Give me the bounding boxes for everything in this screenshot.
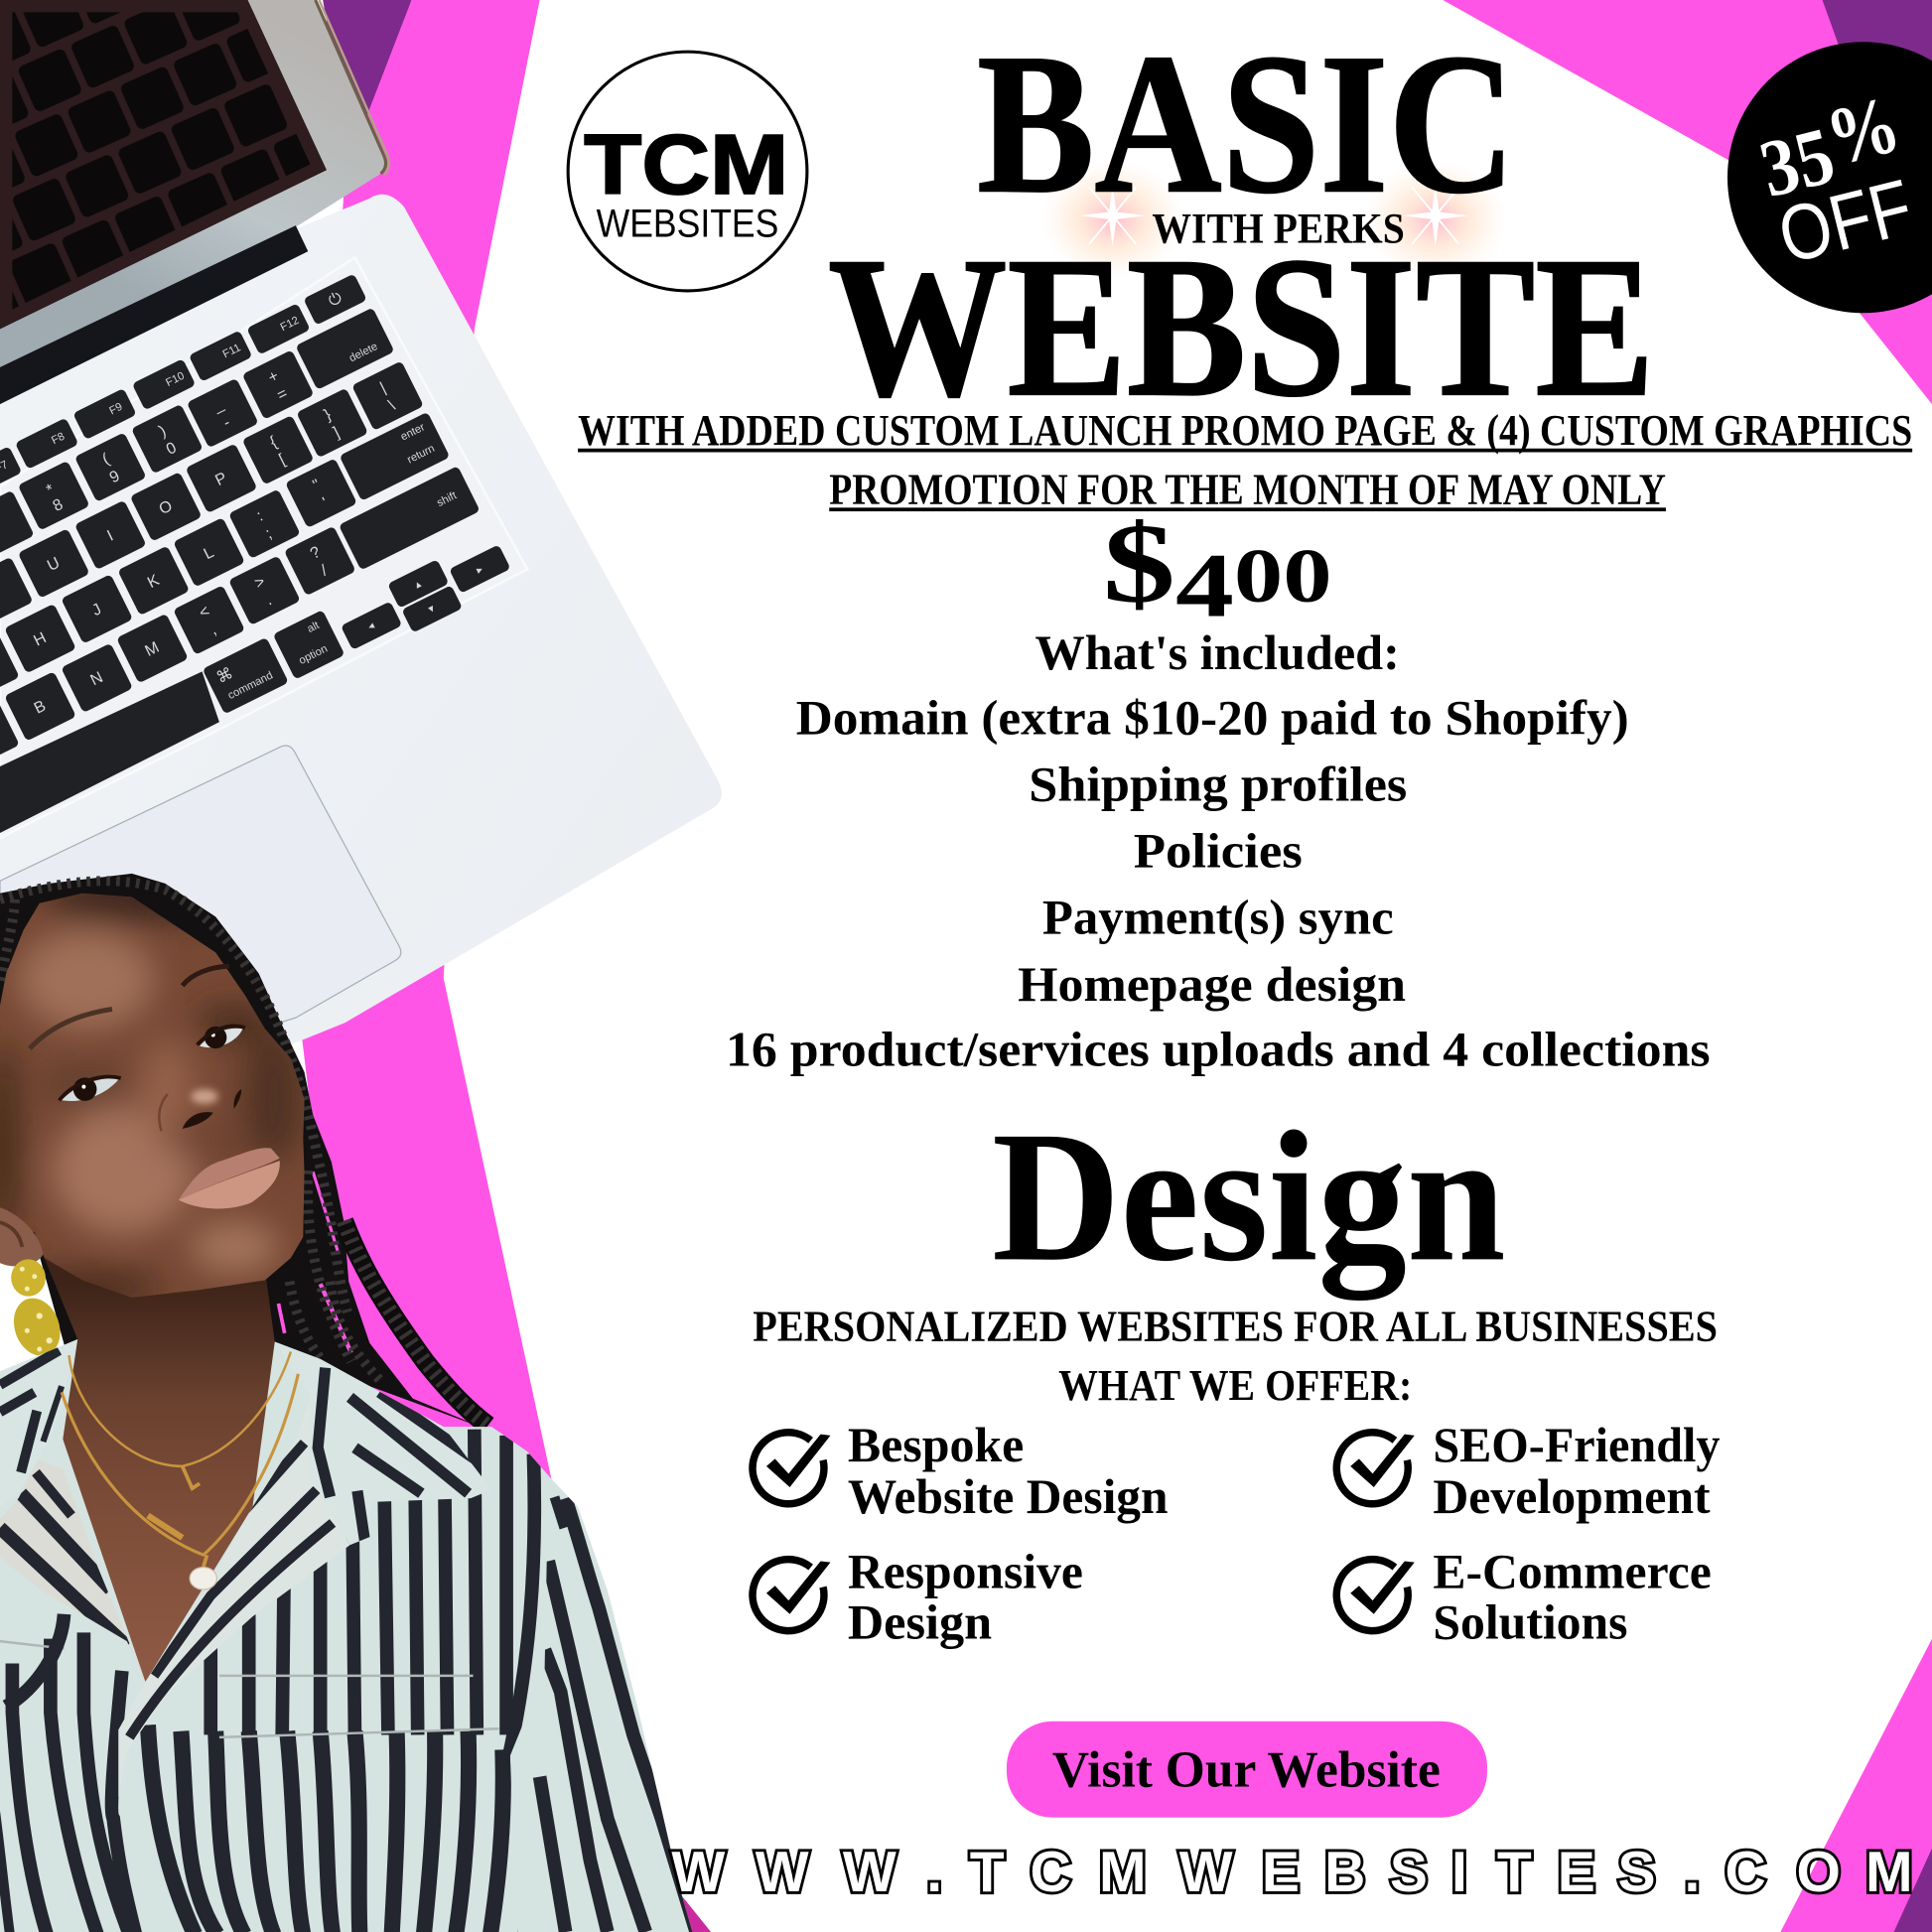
discount badge: % bbox=[1817, 78, 1908, 183]
keyboard keys: P bbox=[212, 469, 230, 489]
left collar lapel bbox=[0, 1460, 141, 1672]
feature: Bespoke Website Design: Bespoke bbox=[848, 1418, 1024, 1472]
keyboard keys: enter bbox=[399, 421, 427, 443]
laptop base bbox=[0, 195, 722, 1232]
feature: E-Commerce Solutions: E-Commerce bbox=[1433, 1545, 1712, 1599]
button: Visit Our Website: Visit Our Website bbox=[1052, 1742, 1441, 1799]
feature: E-Commerce Solutions: Solutions bbox=[1433, 1595, 1627, 1650]
keyboard keys: I bbox=[104, 527, 116, 545]
keyboard keys: ⏻ bbox=[326, 289, 345, 310]
right lapel bbox=[118, 1440, 349, 1797]
keyboard keys: return bbox=[405, 443, 437, 467]
keyboard keys: K bbox=[145, 571, 162, 592]
feature: Responsive Design: Responsive bbox=[848, 1545, 1083, 1599]
keyboard keys: * bbox=[44, 481, 58, 499]
outer braid bbox=[344, 1221, 487, 1426]
keyboard keys: F12 bbox=[279, 315, 301, 334]
feature: Bespoke Website Design: Website Design bbox=[848, 1469, 1169, 1524]
feature: Responsive Design: Design bbox=[848, 1595, 992, 1650]
icon: check circle bbox=[1336, 1433, 1415, 1504]
keyboard keys: ⌘ bbox=[213, 664, 236, 687]
pink slits in braids bbox=[278, 1172, 351, 1353]
keyboard keys: F8 bbox=[50, 431, 67, 447]
feature: Responsive Design bbox=[753, 1545, 1083, 1650]
logo badge: WEBSITES bbox=[597, 202, 778, 245]
discount badge bbox=[1727, 42, 1932, 313]
price: 4 bbox=[1175, 535, 1234, 636]
keyboard keys: } bbox=[322, 405, 335, 424]
logo badge bbox=[568, 52, 807, 291]
shape: bottom-left magenta wedge bbox=[671, 1887, 711, 1932]
included list: Payment(s) sync bbox=[1042, 891, 1394, 945]
keyboard keys: ◂ bbox=[366, 620, 376, 633]
keyboard keys: ▾ bbox=[427, 603, 437, 616]
feature: Bespoke Website Design bbox=[753, 1418, 1169, 1524]
keyboard keys: N bbox=[87, 668, 106, 689]
keyboard keys: ; bbox=[263, 524, 275, 542]
keyboard keys: O bbox=[156, 496, 175, 518]
included list: Homepage design bbox=[1018, 957, 1406, 1012]
keyboard well bbox=[0, 257, 527, 838]
body stripes, upper bbox=[204, 1648, 218, 1735]
promotion line: PROMOTION FOR THE MONTH OF MAY ONLY bbox=[829, 465, 1666, 514]
keyboard keys: F9 bbox=[107, 401, 124, 417]
sparkle: left bbox=[1041, 160, 1184, 278]
keyboard keys: 0 bbox=[163, 439, 180, 459]
keyboard keys: B bbox=[31, 697, 49, 718]
shirt sleeve bbox=[505, 1472, 702, 1932]
lips bbox=[179, 1148, 280, 1208]
keyboard keys: ) bbox=[156, 422, 169, 440]
heading: Design: Design bbox=[992, 1092, 1506, 1301]
nose bbox=[159, 1089, 241, 1131]
keyboard keys: F11 bbox=[221, 342, 242, 360]
tagline: PERSONALIZED WEBSITES FOR ALL BUSINESSES bbox=[753, 1301, 1718, 1350]
keyboard keys: option bbox=[297, 643, 330, 667]
keyboard keys: ( bbox=[99, 450, 113, 469]
shape: bottom-right purple wedge bbox=[1894, 1849, 1932, 1932]
keyboard keys: alt bbox=[306, 620, 322, 635]
keyboard keys: ] bbox=[331, 424, 343, 442]
included list: Domain (extra $10-20 paid to Shopify) bbox=[796, 691, 1629, 746]
keyboard keys: 9 bbox=[106, 467, 122, 486]
keyboard keys: " bbox=[310, 476, 324, 494]
feature: SEO-Friendly Development: Development bbox=[1433, 1469, 1711, 1524]
discount badge: 35 bbox=[1751, 107, 1853, 214]
eyes and brows bbox=[30, 966, 245, 1101]
keyboard keys: < bbox=[197, 602, 212, 622]
icon: check circle bbox=[1336, 1560, 1415, 1631]
keyboard keys: { bbox=[267, 433, 280, 451]
keyboard keys bbox=[0, 274, 510, 833]
keyboard keys: H bbox=[31, 628, 49, 650]
feature: SEO-Friendly Development bbox=[1336, 1418, 1721, 1524]
woman portrait illustration bbox=[0, 863, 702, 1932]
title: WEBSITE: WEBSITE bbox=[828, 215, 1655, 438]
trackpad bbox=[0, 746, 401, 1109]
keyboard keys: 8 bbox=[50, 495, 66, 515]
keyboard keys: U bbox=[45, 554, 63, 575]
keyboard keys: ? bbox=[308, 543, 324, 563]
price: 00 bbox=[1234, 533, 1332, 619]
keyboard keys: _ bbox=[209, 394, 226, 415]
included list: Policies bbox=[1134, 824, 1303, 879]
offer heading: WHAT WE OFFER: bbox=[1058, 1360, 1412, 1410]
shape: top-right purple wedge bbox=[1823, 0, 1932, 73]
feature: SEO-Friendly Development: SEO-Friendly bbox=[1433, 1418, 1721, 1472]
keyboard keys: ▴ bbox=[413, 578, 424, 592]
neck and chest bbox=[45, 1258, 311, 1682]
keyboard keys: [ bbox=[276, 451, 289, 469]
keyboard keys: : bbox=[254, 507, 266, 525]
keyboard keys: - bbox=[220, 413, 233, 432]
website URL: WWW.TCMWEBSITES.COM bbox=[671, 1841, 1913, 1904]
included list: Shipping profiles bbox=[1029, 758, 1407, 812]
title: BASIC: BASIC bbox=[977, 12, 1516, 234]
laptop screen lid bbox=[0, 0, 389, 367]
included list: What's included: bbox=[1035, 625, 1400, 680]
keyboard keys: J bbox=[89, 600, 104, 620]
keyboard keys: > bbox=[251, 573, 268, 593]
laptop photo illustration bbox=[0, 0, 722, 1044]
hair mass bbox=[0, 874, 486, 1430]
keyboard keys: M bbox=[142, 638, 162, 660]
keyboard keys: shift bbox=[435, 489, 460, 509]
keyboard keys: F10 bbox=[164, 370, 187, 389]
face bbox=[0, 894, 304, 1298]
keyboard keys: , bbox=[207, 621, 219, 638]
shape: left pink band bbox=[296, 0, 579, 1601]
shape: bottom-right pink wedge bbox=[1780, 1639, 1932, 1932]
keyboard keys: command bbox=[226, 669, 275, 702]
gold necklaces bbox=[62, 1351, 298, 1589]
keyboard keys: ▸ bbox=[475, 563, 485, 577]
braid texture bbox=[0, 881, 382, 1382]
keyboard keys: \ bbox=[386, 396, 398, 414]
keyboard keys: + bbox=[265, 366, 282, 387]
icon: check circle bbox=[753, 1433, 830, 1504]
keyboard keys: delete bbox=[347, 341, 379, 364]
subtitle: WITH PERKS: WITH PERKS bbox=[1152, 205, 1405, 252]
skin shading bbox=[0, 878, 303, 1305]
keyboard keys: . bbox=[263, 591, 275, 609]
keyboard keys: ' bbox=[320, 494, 331, 511]
striped shirt bbox=[0, 1330, 702, 1932]
icon: check circle bbox=[753, 1560, 830, 1631]
shape: top-left purple wedge bbox=[323, 0, 412, 123]
sparkle: right bbox=[1364, 160, 1507, 278]
button: Visit Our Website bbox=[1007, 1722, 1487, 1818]
keyboard keys: / bbox=[318, 561, 331, 580]
right collar bbox=[275, 1342, 483, 1545]
left pocket flap bbox=[6, 1614, 65, 1707]
left collar stand bbox=[0, 1339, 77, 1473]
feature: E-Commerce Solutions bbox=[1336, 1545, 1712, 1650]
shape: top-right pink wedge bbox=[1443, 0, 1932, 404]
pocket seams bbox=[0, 1641, 499, 1737]
ear bbox=[0, 1207, 43, 1266]
included list bbox=[726, 625, 1711, 1077]
keyboard keys: L bbox=[201, 543, 216, 563]
included list: 16 product/services uploads and 4 collections bbox=[726, 1023, 1711, 1077]
hinge bbox=[0, 225, 308, 404]
price: $ bbox=[1103, 500, 1175, 626]
keyboard keys: | bbox=[377, 379, 389, 397]
keyboard keys: = bbox=[274, 384, 290, 404]
earring bbox=[6, 1259, 68, 1362]
body stripes, lower bbox=[148, 1725, 195, 1932]
placket and left stripes bbox=[112, 1671, 136, 1932]
logo badge: TCM bbox=[584, 117, 788, 212]
